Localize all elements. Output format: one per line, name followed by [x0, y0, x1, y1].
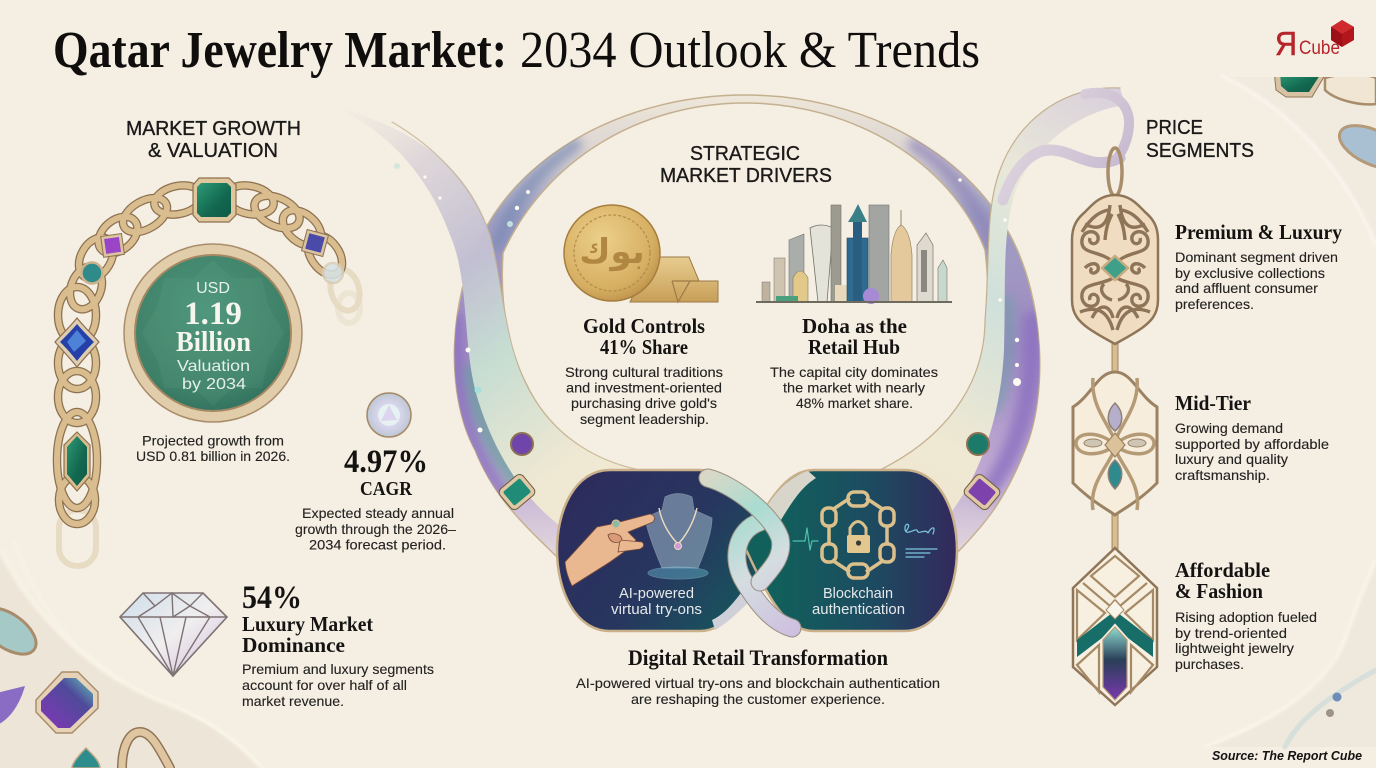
pale right strand: [880, 88, 1125, 540]
segment: mid-tier: Growing demand: [1175, 420, 1283, 436]
logo: RCube: [1275, 20, 1354, 62]
driver: gold share: [565, 314, 723, 427]
stat: CAGR: [295, 444, 456, 552]
segment: affordable and fashion: lightweight jewelry: [1175, 640, 1294, 656]
label: AI-powered: [619, 585, 694, 602]
logo: RCube: Я: [1275, 25, 1297, 62]
stat: CAGR: CAGR: [360, 478, 412, 500]
segment: mid-tier: Mid-Tier: [1175, 391, 1251, 415]
segment: mid-tier: [1175, 391, 1329, 483]
chain links: [57, 181, 349, 524]
icon: Doha skyline: [756, 204, 952, 304]
gold gemstone chain: [55, 178, 364, 566]
section heading: market growth: MARKET GROWTH: [126, 118, 301, 140]
panel: blockchain authentication: [744, 470, 957, 631]
ribbon necklace frame: [330, 88, 1129, 560]
driver: gold share: 41% Share: [600, 335, 688, 359]
stat: CAGR: growth through the 2026–: [295, 521, 456, 537]
logo: RCube: Cube: [1299, 38, 1340, 59]
icon: chain and padlock: [822, 492, 894, 578]
segment: affordable and fashion: Rising adoption fueled: [1175, 609, 1317, 625]
segment: affordable and fashion: & Fashion: [1175, 579, 1263, 603]
pendant: mid-tier knot: [1073, 372, 1157, 515]
segment: mid-tier: luxury and quality: [1175, 451, 1288, 467]
section heading: strategic market drivers: MARKET DRIVERS: [660, 165, 832, 187]
valuation note: Projected growth from: [142, 432, 284, 448]
inner cream field: [502, 103, 988, 535]
segment: affordable and fashion: by trend-oriented: [1175, 625, 1287, 641]
segment: premium and luxury: by exclusive collections: [1175, 265, 1325, 281]
driver: Doha retail hub: the market with nearly: [783, 380, 925, 396]
valuation note: USD 0.81 billion in 2026.: [136, 448, 290, 464]
gem: purple square: [101, 234, 124, 257]
driver: gold share: and investment-oriented: [566, 380, 722, 396]
pendant: affordable geometric: [1073, 548, 1157, 705]
valuation medallion: USD: [196, 280, 230, 297]
source note: Source: The Report Cube: [1212, 749, 1362, 763]
section heading: price segments: [1146, 117, 1254, 162]
gem: sapphire: [55, 318, 99, 367]
ribbon gems: [497, 433, 1002, 512]
icon: gold coin and bars: [564, 205, 718, 302]
valuation medallion: by 2034: [182, 376, 246, 393]
stat: luxury dominance: Luxury Market: [242, 612, 373, 636]
driver: gold share: segment leadership.: [580, 411, 709, 427]
icon: signature: [905, 524, 937, 557]
segment: premium and luxury: Premium & Luxury: [1175, 220, 1342, 244]
segment: affordable and fashion: purchases.: [1175, 656, 1244, 672]
stat: luxury dominance: market revenue.: [242, 693, 344, 709]
valuation medallion: Billion: [176, 326, 251, 358]
driver: Doha retail hub: Doha as the: [802, 314, 907, 338]
segment: premium and luxury: [1175, 220, 1342, 312]
ring band: [454, 95, 1040, 560]
stat: luxury dominance: Dominance: [242, 633, 345, 657]
icon: bust with necklace: [645, 494, 712, 579]
loop: [1085, 93, 1129, 160]
panel: AI virtual try-on: [557, 470, 770, 631]
segment: premium and luxury: and affluent consumer: [1175, 280, 1318, 296]
driver: Doha retail hub: 48% market share.: [796, 395, 913, 411]
stat: luxury dominance: Premium and luxury segments: [242, 661, 434, 677]
segment: affordable and fashion: [1175, 558, 1317, 672]
icon: diamond: [120, 593, 227, 676]
segment: affordable and fashion: Affordable: [1175, 558, 1270, 582]
title: [53, 22, 980, 79]
stat: CAGR: Expected steady annual: [302, 505, 454, 521]
gem: indigo square: [302, 230, 328, 256]
pendant: premium filigree: [1072, 195, 1158, 344]
icon: opal gem: [367, 393, 411, 437]
stat: luxury dominance: account for over half of all: [242, 677, 407, 693]
digital retail transformation: AI-powered virtual try-ons and blockchain authentication: [576, 675, 940, 691]
label: Blockchain: [823, 585, 893, 602]
icon: pulse: [793, 528, 818, 550]
driver: gold share: purchasing drive gold's: [571, 395, 717, 411]
title: Qatar Jewelry Market:: [53, 22, 507, 79]
digital retail transformation: Digital Retail Transformation: [628, 645, 888, 670]
ribbon twist: [708, 471, 816, 630]
gem: pearl: [323, 263, 343, 283]
digital retail transformation: [576, 645, 940, 707]
faded chain ends: [59, 266, 364, 566]
corner gems: top right: [1274, 77, 1376, 168]
section heading: market growth: [126, 118, 301, 162]
gem: emerald top: [193, 178, 236, 222]
valuation medallion: Valuation: [177, 358, 250, 375]
stat: luxury dominance: [242, 580, 434, 709]
icon: hand: [565, 514, 654, 586]
panel: AI virtual try-on: virtual try-ons: [611, 601, 702, 618]
segment: premium and luxury: Dominant segment driven: [1175, 249, 1338, 265]
background swoosh: top right: [1222, 76, 1376, 245]
driver: Doha retail hub: Retail Hub: [808, 335, 900, 359]
digital retail transformation: are reshaping the customer experience.: [631, 691, 885, 707]
section heading: strategic market drivers: [660, 143, 832, 187]
stat: luxury dominance: 54%: [242, 580, 302, 616]
valuation note: [136, 432, 290, 464]
stat: CAGR: 2034 forecast period.: [309, 536, 446, 552]
segment: mid-tier: supported by affordable: [1175, 436, 1329, 452]
pale left strand: [330, 105, 640, 545]
gem: long emerald: [64, 432, 90, 491]
valuation medallion: [124, 244, 302, 422]
sparkles: [394, 163, 1021, 432]
driver: gold share: Gold Controls: [583, 314, 705, 338]
pendant chain connectors: [1108, 148, 1122, 558]
driver: Doha retail hub: [770, 314, 938, 411]
background swoosh: bottom left: [0, 540, 262, 768]
segment: premium and luxury: preferences.: [1175, 296, 1254, 312]
driver: Doha retail hub: The capital city dominates: [770, 364, 938, 380]
colour shimmer on ring: [455, 145, 1033, 495]
section heading: market growth: & VALUATION: [148, 140, 278, 162]
icon: gold coin and bars: بوك: [579, 232, 645, 272]
valuation medallion: 1.19: [184, 296, 242, 332]
corner gems: bottom left: [0, 599, 170, 768]
stat: CAGR: 4.97%: [344, 444, 428, 480]
background swoosh: bottom right: [1205, 560, 1376, 747]
title: 2034 Outlook & Trends: [520, 22, 980, 79]
section heading: price segments: SEGMENTS: [1146, 140, 1254, 162]
section heading: price segments: PRICE: [1146, 117, 1203, 139]
segment: mid-tier: craftsmanship.: [1175, 467, 1270, 483]
gem: teal round: [82, 262, 102, 284]
section heading: strategic market drivers: STRATEGIC: [690, 143, 800, 165]
driver: gold share: Strong cultural traditions: [565, 364, 723, 380]
panel: blockchain authentication: authentication: [812, 601, 905, 618]
